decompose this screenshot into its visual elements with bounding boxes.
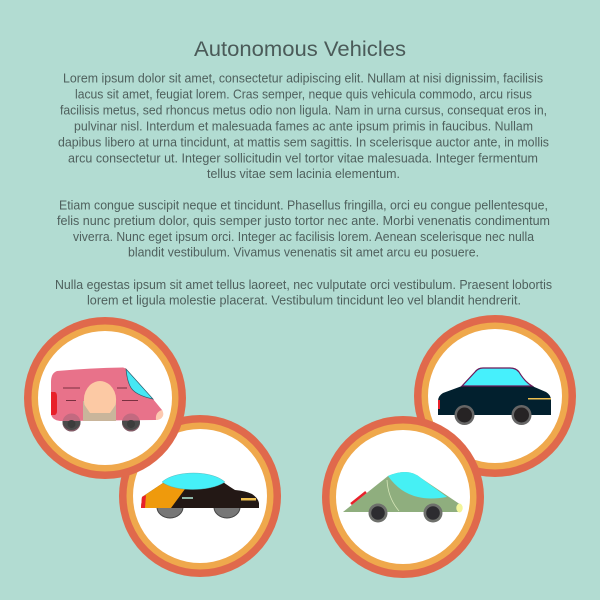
text block: paragraph 3 (55, 278, 552, 308)
panel: pink van (24, 317, 186, 479)
text block: paragraph 3: lorem et ligula molestie placerat. Vestibulum tincidunt leo vel blandit hendrerit. (87, 294, 521, 308)
icon: van (51, 368, 163, 432)
title: Autonomous Vehicles (194, 38, 406, 61)
panel: green wedge car (322, 416, 484, 578)
text block: paragraph 1: lacus sit amet, feugiat lorem. Cras semper, neque quis vehicula commodo, arcu risus (75, 88, 532, 102)
text block: paragraph 3: Nulla egestas ipsum sit amet tellus laoreet, nec vulputate orci vestibulum. Praesent lobortis (55, 278, 552, 292)
panel: black and orange sports car (119, 415, 281, 577)
text block: paragraph 1: tellus vitae sem lacinia elementum. (207, 167, 400, 181)
text block: paragraph 1 (58, 72, 549, 181)
icon: wedge car (343, 472, 463, 522)
text block: paragraph 2: felis nunc pretium dolor, quis semper justo tortor nec ante. Morbi venenatis condimentum (57, 214, 550, 228)
text block: paragraph 2: Etiam congue suscipit neque et tincidunt. Phasellus fringilla, orci eu congue pellentesque, (59, 198, 548, 212)
text block: paragraph 1: dapibus libero at urna tincidunt, at mattis sem sagittis. In scelerisque auctor ante, in mollis (58, 136, 549, 150)
text block: paragraph 1: Lorem ipsum dolor sit amet, consectetur adipiscing elit. Nullam at nisi dignissim, facilisis (63, 72, 543, 86)
text block: paragraph 1: facilisis metus, sed rhoncus metus odio non ligula. Nam in urna cursus, consequat eros in, (60, 104, 547, 118)
text block: paragraph 1: pulvinar nisl. Interdum et malesuada fames ac ante ipsum primis in faucibus. Nullam (74, 120, 533, 134)
text block: paragraph 1: arcu consectetur ut. Integer sollicitudin vel tortor vitae malesuada. Integer fermentum (68, 152, 538, 166)
text block: paragraph 2: viverra. Nunc eget ipsum orci. Integer ac facilisis lorem. Aenean scelerisque nec nulla (73, 230, 534, 244)
panel: dark blue sedan (414, 315, 576, 477)
text block: paragraph 2: blandit vestibulum. Vivamus venenatis sit amet arcu eu posuere. (128, 246, 479, 260)
text block: paragraph 2 (57, 198, 550, 260)
icon: sedan (438, 368, 551, 425)
icon: sports car (141, 473, 259, 518)
